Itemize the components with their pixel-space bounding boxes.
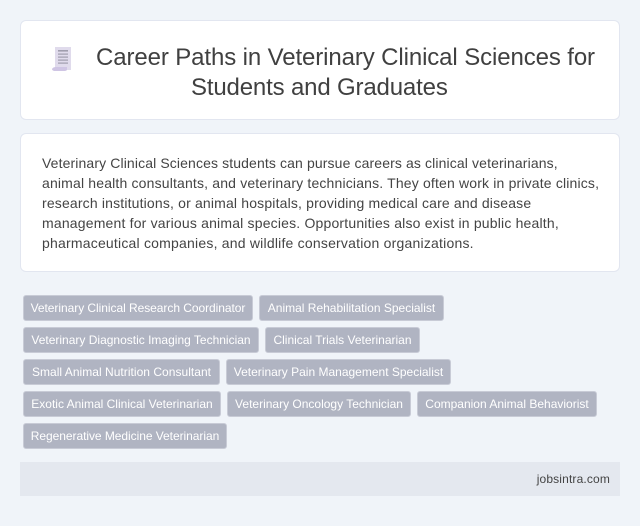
tag: Clinical Trials Veterinarian: [273, 333, 412, 347]
tag: Animal Rehabilitation Specialist: [268, 301, 435, 315]
tag: [23, 327, 259, 353]
footer bar: [20, 462, 620, 496]
title: Career Paths in Veterinary Clinical Sciences for: [96, 44, 595, 71]
header panel: [20, 20, 620, 120]
tag: [417, 391, 597, 417]
description text: Veterinary Clinical Sciences students can pursue careers as clinical veterinarians,: [42, 155, 558, 171]
title: [96, 44, 595, 101]
tag: Veterinary Diagnostic Imaging Technician: [31, 333, 251, 347]
description text: management for various animal species. Opportunities also exist in public health,: [42, 215, 559, 231]
tag: [226, 359, 451, 385]
tag: Regenerative Medicine Veterinarian: [31, 429, 219, 443]
icon: document scroll: [52, 47, 71, 71]
tag: Companion Animal Behaviorist: [425, 397, 589, 411]
footer bar: jobsintra.com: [537, 472, 610, 486]
tag: [23, 391, 221, 417]
tags list: [23, 295, 597, 449]
tag: Exotic Animal Clinical Veterinarian: [31, 397, 213, 411]
description panel: [20, 133, 620, 272]
tag: [23, 359, 220, 385]
description text: research institutions, or animal hospitals, providing medical care and disease: [42, 195, 531, 211]
tag: [227, 391, 411, 417]
tag: Veterinary Oncology Technician: [235, 397, 403, 411]
tag: Small Animal Nutrition Consultant: [32, 365, 211, 379]
title: Students and Graduates: [191, 74, 448, 101]
tag: [259, 295, 444, 321]
tag: [23, 295, 253, 321]
description text: pharmaceutical companies, and wildlife conservation organizations.: [42, 235, 474, 251]
description text: animal health consultants, and veterinary technicians. They often work in private clinics,: [42, 175, 599, 191]
tag: Veterinary Clinical Research Coordinator: [31, 301, 245, 315]
description text: [42, 155, 599, 251]
tag: [265, 327, 420, 353]
tag: Veterinary Pain Management Specialist: [234, 365, 443, 379]
tag: [23, 423, 227, 449]
